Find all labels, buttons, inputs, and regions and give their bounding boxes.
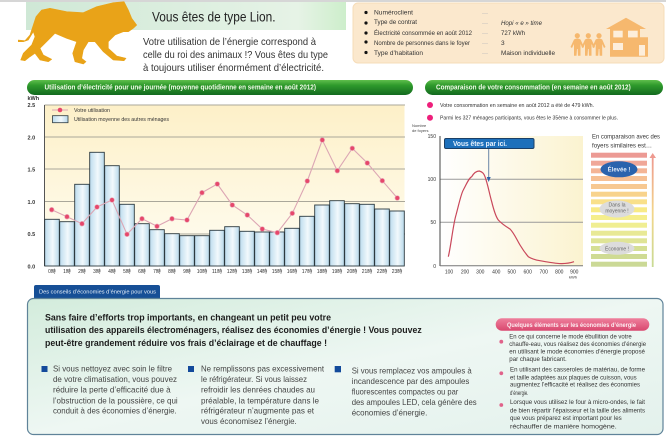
headline — [45, 313, 422, 349]
label: average — [600, 200, 634, 218]
x axis labels: 900 — [570, 270, 579, 276]
chart: distribution of households: Nombre — [412, 123, 427, 128]
fact: cookware: d’énergie. — [510, 391, 529, 397]
x axis labels: 12時 — [227, 269, 237, 275]
tip: refrigerator: le réfrigérateur. Si vous laissez — [201, 375, 307, 384]
tip: light bulbs: économies d’énergie. — [352, 408, 427, 417]
x axis labels: 700 — [540, 270, 548, 276]
sidebar heading: Quelques éléments sur les économies d’énergie — [507, 323, 637, 329]
y axis labels — [428, 134, 436, 270]
separators: --- — [482, 51, 488, 57]
headline: peut-être grandement réduire vos frais d’éclairage et de chauffage ! — [45, 338, 327, 349]
tip: refrigerator — [188, 365, 325, 426]
y axis labels: 1.0 — [28, 200, 35, 206]
tip: air conditioner filter: Si vous nettoyez avec soin le filtre — [53, 365, 172, 374]
x axis labels: 200 — [461, 270, 469, 276]
tip: refrigerator: réfrigérateur n’augmente pas et — [201, 407, 315, 416]
tip: light bulbs: fluorescentes compactes ou par — [352, 388, 459, 397]
values: 3 — [501, 40, 505, 47]
separators: --- — [482, 31, 488, 37]
labels: Type de contrat — [374, 19, 417, 26]
panel: energy saving advice — [28, 285, 663, 434]
x axis labels: 5時 — [123, 269, 131, 275]
x axis labels: 1時 — [63, 269, 71, 275]
values: 727 kWh — [501, 30, 525, 37]
tip: air conditioner filter: l’obstruction de la poussière, ce qui — [53, 396, 178, 405]
y axis labels: 0.5 — [28, 232, 35, 238]
x axis labels — [48, 269, 402, 275]
headline: utilisation des appareils électroménagers, réalisez des économies d’énergie ! Vous pouvez — [45, 325, 422, 336]
marker: you are here: Vous êtes par ici. — [453, 139, 507, 148]
x axis labels: 9時 — [183, 269, 191, 275]
values — [501, 20, 555, 57]
tip: air conditioner filter: réduire la perte d’efficacité due à — [53, 386, 171, 395]
tip: refrigerator: refroidir les denrées chaudes au — [201, 386, 315, 395]
x axis labels: 0時 — [48, 269, 56, 275]
sidebar heading — [496, 318, 649, 331]
fact: cookware: augmentez l’efficacité et réalisez des économies — [510, 383, 640, 389]
y axis labels: kWh — [28, 96, 40, 102]
fact: cookware: En utilisant des casseroles de matériau, de forme — [510, 368, 646, 374]
x axis labels: 16時 — [287, 269, 297, 275]
y axis labels: 2.5 — [28, 103, 35, 109]
label: average: moyenne ! — [605, 208, 629, 214]
fact: water heater: par chaque fabricant. — [509, 357, 567, 363]
text block: type description: Votre utilisation de l’énergie correspond à — [143, 36, 316, 48]
label: high: Élevée ! — [608, 166, 630, 174]
separators: --- — [482, 21, 488, 27]
y axis labels: 150 — [428, 134, 436, 140]
tab heading — [34, 285, 160, 298]
y axis labels: 1.5 — [28, 168, 35, 174]
tip: light bulbs: Si vous remplacez vos ampoules à — [352, 366, 472, 375]
chart: distribution of households: de foyers — [412, 128, 428, 133]
fact: water heater: en utilisant le mode économies d’énergie proposé — [509, 349, 646, 355]
fact: microwave — [499, 400, 645, 430]
chart: distribution of households — [412, 123, 583, 280]
tip: refrigerator: Ne remplissons pas excessivement — [201, 365, 325, 374]
scale: consumption level — [591, 153, 656, 267]
x axis labels: 3時 — [93, 269, 101, 275]
y axis labels: 2.0 — [28, 136, 35, 142]
y axis labels: 50 — [430, 220, 436, 226]
headline: Sans faire d’efforts trop importants, en changeant un petit peu votre — [45, 313, 331, 324]
fact: microwave: que vous préparez est important pour les — [510, 416, 622, 422]
tip: refrigerator: préalable, la température dans le — [201, 396, 319, 405]
x axis labels: 13時 — [242, 269, 252, 275]
tab heading: Des conseils d’économies d’énergie pour vous — [39, 290, 156, 296]
y axis labels: 0 — [433, 264, 436, 270]
labels: Nombre de personnes dans le foyer — [374, 40, 471, 47]
arrow: scale direction — [650, 153, 656, 267]
tip: air conditioner filter: de votre climatisation, vous pouvez — [53, 375, 177, 384]
icon: family — [570, 33, 606, 56]
line: your usage — [49, 138, 400, 237]
x axis labels: 17時 — [302, 269, 312, 275]
label: average: Dans la — [609, 202, 626, 208]
heading: daily electricity use: Utilisation d’électricité pour une journée (moyenne quotidienne en semaine en août 2012) — [44, 82, 316, 92]
x axis labels: 21時 — [362, 269, 372, 275]
labels: Électricité consommée en août 2012 — [374, 28, 472, 37]
icon: house — [606, 18, 648, 57]
x axis labels: 23時 — [392, 269, 402, 275]
text block: similar households — [592, 134, 661, 150]
legend: Votre utilisation — [74, 108, 110, 114]
x axis labels: kWh — [569, 274, 577, 280]
x axis labels: 100 — [445, 270, 453, 276]
values: Hopi « e » time — [501, 20, 542, 27]
distribution curve — [448, 171, 574, 264]
x axis labels: 7時 — [153, 269, 161, 275]
labels: Type d’habitation — [374, 50, 423, 57]
separators: --- — [482, 11, 488, 17]
text block: type description: à toujours utiliser énormément d’électricité. — [143, 62, 324, 74]
y axis labels — [28, 96, 40, 270]
sidebar: energy saving facts — [496, 318, 649, 430]
legend: Utilisation moyenne des autres ménages — [74, 117, 169, 123]
panel: customer information — [353, 3, 664, 63]
fact: microwave: réchauffer de manière homogène. — [510, 424, 617, 430]
x axis labels — [445, 270, 579, 280]
icon: lion silhouette — [18, 2, 137, 64]
tip: light bulbs — [335, 366, 477, 417]
bullet: ranking: Parmi les 327 ménages participants, vous êtes le 35ème à consommer le plus. — [440, 116, 618, 122]
tip: air conditioner filter — [42, 365, 178, 416]
x axis labels: 400 — [492, 270, 501, 276]
tip: light bulbs: incandescence par des ampoules — [352, 377, 469, 386]
labels: Numéroclient — [374, 10, 413, 16]
heading: consumption comparison — [425, 80, 663, 95]
fact: cookware: et taille adaptées aux plaques de cuisson, vous — [510, 375, 637, 381]
tip: air conditioner filter: conduit à des économies d’énergie. — [53, 407, 177, 416]
x axis labels: 22時 — [377, 269, 387, 275]
marker: you are here — [444, 138, 534, 182]
chart: hourly electricity use — [28, 96, 405, 275]
y axis labels: 0.0 — [28, 264, 35, 270]
x axis labels: 6時 — [138, 269, 146, 275]
title: Vous êtes de type Lion. — [152, 10, 276, 24]
fact: water heater — [499, 334, 647, 363]
x axis labels: 8時 — [168, 269, 176, 275]
x axis labels: 800 — [555, 270, 564, 276]
tip: light bulbs: des ampoules LED, cela génère des — [352, 398, 477, 407]
text block: type description — [143, 36, 328, 74]
fact: water heater: En ce qui concerne le mode ébullition de votre — [509, 334, 632, 340]
tip: refrigerator: vous économisez l’énergie. — [201, 417, 297, 426]
bullet list — [364, 11, 368, 54]
x axis labels: 600 — [524, 270, 532, 276]
fact: cookware — [499, 368, 646, 397]
title banner — [26, 2, 346, 30]
x axis labels: 14時 — [257, 269, 267, 275]
labels — [374, 10, 472, 57]
x axis labels: 19時 — [332, 269, 342, 275]
x axis labels: 4時 — [108, 269, 116, 275]
x axis labels: 15時 — [272, 269, 282, 275]
heading: consumption comparison: Comparaison de votre consommation (en semaine en août 2012) — [436, 82, 631, 92]
fact: water heater: chauffe-eau, vous réalisez des économies d’énergie — [509, 342, 647, 348]
bullet: monthly consumption: Votre consommation en semaine en août 2012 a été de 479 kWh. — [440, 103, 594, 109]
values: Maison individuelle — [501, 50, 555, 57]
fact: microwave: Lorsque vous utilisez le four à micro-ondes, le fait — [510, 400, 645, 406]
x axis labels: 10時 — [197, 269, 207, 275]
x axis labels: 20時 — [347, 269, 357, 275]
text block: type description: celle du roi des animaux !? Vous êtes du type — [143, 49, 328, 61]
x axis labels: 2時 — [78, 269, 86, 275]
separators: --- — [482, 41, 488, 47]
x axis labels: 18時 — [317, 269, 327, 275]
bars: other households — [45, 152, 404, 266]
heading: daily electricity use — [27, 80, 413, 95]
y axis labels: 100 — [428, 177, 436, 183]
separators — [482, 11, 488, 57]
text block: similar households: foyers similaires est… — [592, 142, 652, 150]
x axis labels: 500 — [508, 270, 516, 276]
x axis labels: 11時 — [212, 269, 222, 275]
legend — [52, 108, 169, 123]
label: economical: Économe ! — [605, 245, 629, 252]
fact: microwave: de bien répartir l’épaisseur et la taille des aliments — [510, 408, 645, 414]
x axis labels: 300 — [476, 270, 485, 276]
